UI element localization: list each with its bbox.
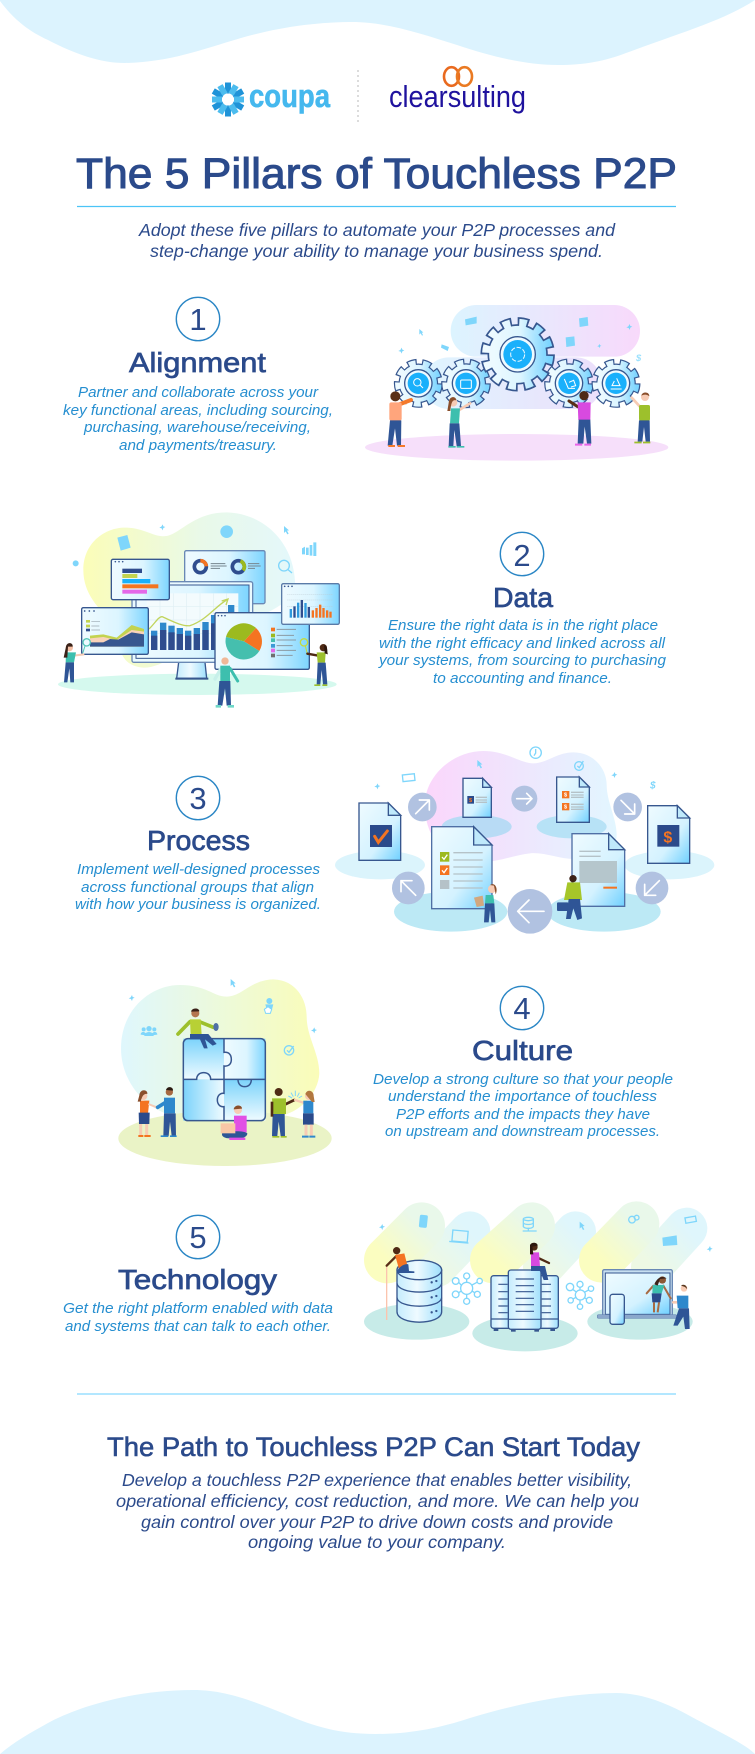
window: bar chart <box>282 584 339 624</box>
person: woman on laptop <box>647 1276 671 1312</box>
divider line <box>77 1393 676 1395</box>
intro text <box>138 220 616 261</box>
description: process: across functional groups that align <box>81 879 314 896</box>
illustration: puzzle and team <box>118 979 332 1166</box>
description: data <box>378 617 667 687</box>
description: technology: and systems that can talk to each other. <box>65 1318 331 1335</box>
description: technology <box>63 1300 333 1335</box>
logo: clearsulting <box>389 67 526 114</box>
window: area chart <box>82 608 148 654</box>
server rack <box>491 1270 558 1332</box>
person 4 <box>632 392 650 443</box>
description: alignment <box>63 384 333 454</box>
panel: pillar 2 data <box>58 512 667 708</box>
person: right woman <box>300 639 328 686</box>
person: woman with clipboard <box>474 884 497 922</box>
closing heading: The Path to Touchless P2P Can Start Today <box>107 1432 641 1462</box>
person: center man <box>215 657 238 708</box>
person 2 <box>447 397 470 448</box>
database <box>397 1260 442 1322</box>
title: The 5 Pillars of Touchless P2P <box>76 150 677 198</box>
number badge 5: 5 <box>189 1220 207 1255</box>
number badge 1: 1 <box>189 302 207 337</box>
person: left woman <box>64 639 90 682</box>
logos <box>212 67 526 122</box>
document 6 <box>648 806 690 863</box>
panel: pillar 5 technology <box>63 1215 713 1351</box>
monitor <box>132 582 253 680</box>
laptop and phone <box>597 1270 677 1324</box>
closing text: ongoing value to your company. <box>248 1532 506 1552</box>
heading: alignment: Alignment <box>129 347 266 378</box>
document 1 <box>359 803 401 860</box>
heading: data: Data <box>493 582 553 613</box>
heading: culture: Culture <box>472 1035 573 1066</box>
document 5 <box>572 834 625 906</box>
intro text: step-change your ability to manage your business spend. <box>150 241 603 261</box>
document 2: $ <box>469 798 473 804</box>
illustration: document workflow: $ <box>649 780 656 791</box>
description: data: your systems, from sourcing to purchasing <box>378 652 667 669</box>
description: alignment: and payments/treasury. <box>119 437 277 454</box>
number badge 4: 4 <box>513 991 531 1026</box>
document 2 <box>463 778 491 817</box>
person: seated on server <box>530 1243 549 1280</box>
description: culture: understand the importance of touchless <box>388 1088 658 1105</box>
panel: pillar 4 culture <box>118 979 673 1166</box>
person 3 <box>569 391 591 446</box>
bottom wave <box>0 1690 755 1754</box>
number badge 4 <box>500 986 544 1030</box>
illustration: data, servers, devices <box>364 1215 713 1351</box>
description: data: to accounting and finance. <box>433 670 612 687</box>
description: alignment: Partner and collaborate across your <box>78 384 319 401</box>
top wave <box>0 0 755 65</box>
number badge 1 <box>176 297 220 341</box>
description: process <box>75 861 321 913</box>
intro text: Adopt these five pillars to automate your P2P processes and <box>138 220 616 240</box>
description: culture: P2P efforts and the impacts they have <box>396 1106 650 1123</box>
description: culture: on upstream and downstream processes. <box>385 1123 660 1140</box>
number badge 3 <box>176 776 220 820</box>
document 6: $ <box>663 829 672 846</box>
network icon 2 <box>566 1281 594 1309</box>
document 3 <box>557 777 589 822</box>
person: man with briefcase <box>557 875 582 920</box>
document 4 <box>432 827 492 909</box>
description: process: with how your business is organized. <box>75 896 321 913</box>
closing text: Develop a touchless P2P experience that enables better visibility, <box>122 1470 632 1490</box>
window: bar list <box>111 559 169 600</box>
closing text: operational efficiency, cost reduction, and more. We can help you <box>116 1491 639 1511</box>
heading: process: Process <box>147 825 250 856</box>
description: data: with the right efficacy and linked across all <box>379 635 666 652</box>
number badge 5 <box>176 1215 220 1259</box>
description: technology: Get the right platform enabled with data <box>63 1300 333 1317</box>
closing text: gain control over your P2P to drive down costs and provide <box>141 1512 613 1532</box>
window: donuts <box>185 551 265 604</box>
person: seated on database <box>387 1247 414 1320</box>
person: high-five pair <box>272 1088 315 1138</box>
divider <box>357 70 359 122</box>
illustration: document workflow <box>335 747 714 934</box>
number badge 2 <box>500 532 544 576</box>
logo: clearsulting: clearsulting <box>389 79 526 114</box>
person 1 <box>388 391 411 447</box>
number badge 2: 2 <box>513 538 531 573</box>
number badge 3: 3 <box>189 781 207 816</box>
document 3: $ <box>564 805 568 811</box>
network icon 1 <box>452 1273 482 1304</box>
panel: pillar 3 process <box>75 747 714 934</box>
puzzle <box>183 1039 265 1121</box>
illustration: gears and team: $ <box>635 353 642 363</box>
window: pie chart <box>215 613 309 669</box>
logo: coupa: coupa <box>249 78 330 114</box>
description: alignment: key functional areas, including sourcing, <box>63 402 333 419</box>
description: alignment: purchasing, warehouse/receiving, <box>83 419 311 436</box>
illustration: gears and team <box>365 305 668 461</box>
closing text <box>116 1470 639 1552</box>
illustration: dashboards <box>58 512 339 708</box>
person: man by laptop <box>673 1285 690 1329</box>
description: process: Implement well-designed processes <box>77 861 321 878</box>
flow arrows <box>392 786 668 934</box>
logo: coupa <box>212 78 330 116</box>
person: seated on puzzle <box>178 1008 219 1048</box>
description: data: Ensure the right data is in the right place <box>388 617 658 634</box>
person: handshake pair <box>138 1087 177 1137</box>
panel: pillar 1 alignment <box>63 297 668 461</box>
description: culture <box>373 1071 673 1140</box>
document 3: $ <box>564 793 568 799</box>
heading: technology: Technology <box>118 1264 277 1295</box>
person: seated with laptop <box>221 1105 247 1140</box>
description: culture: Develop a strong culture so that your people <box>373 1071 673 1088</box>
